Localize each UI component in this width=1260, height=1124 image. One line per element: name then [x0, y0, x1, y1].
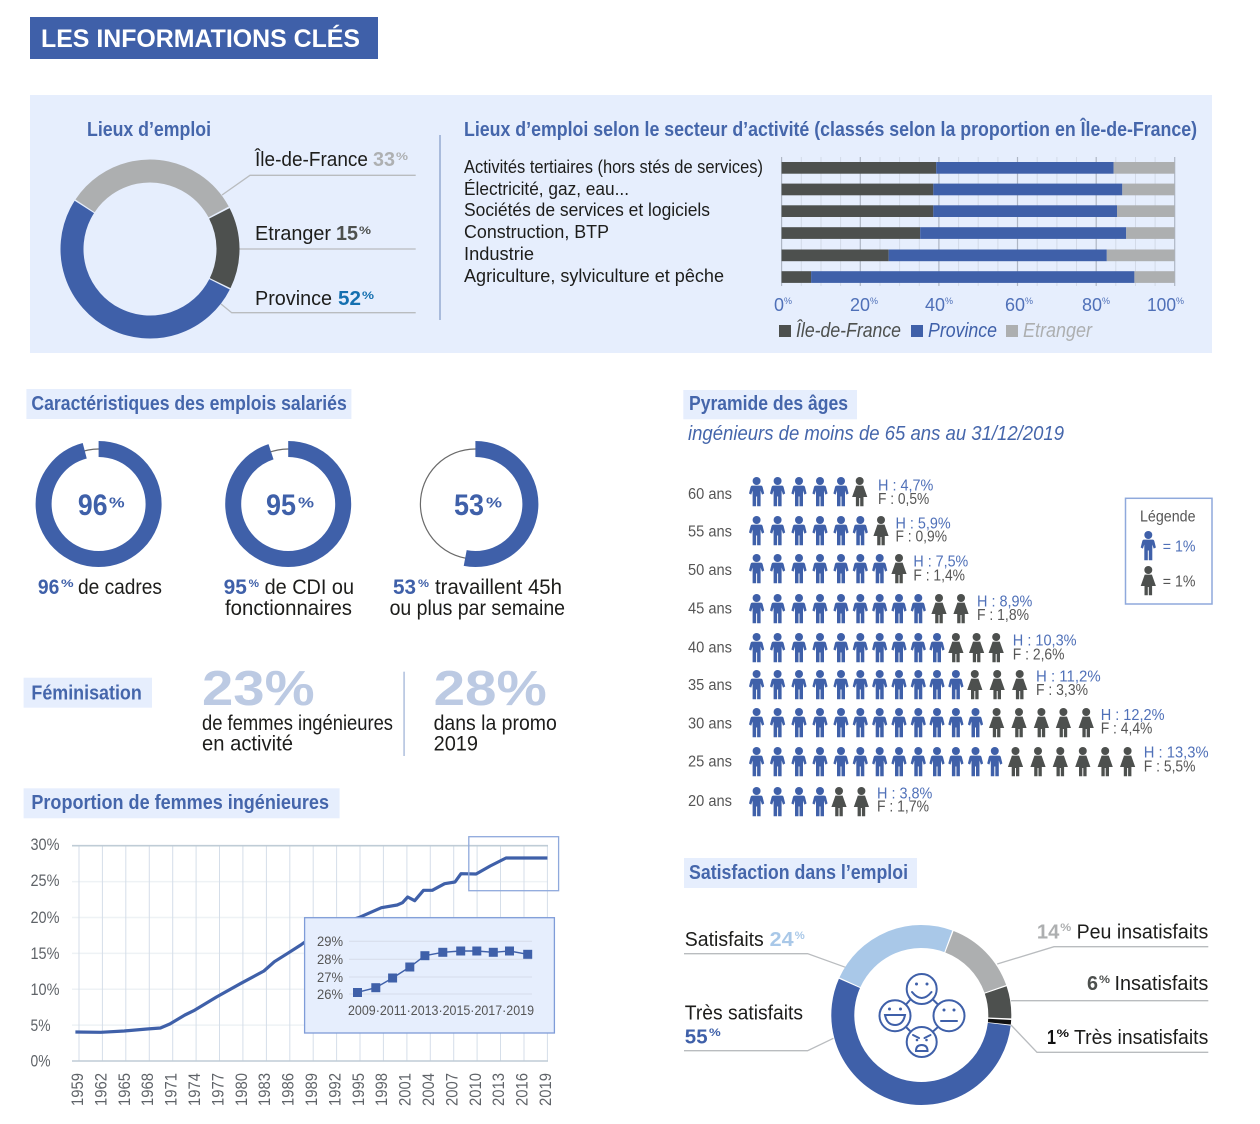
- x axis labels: 1965: [115, 1073, 134, 1106]
- section: proportion de femmes ingénieures: [24, 788, 340, 818]
- label: insatisfaits 6%: 6: [1087, 973, 1098, 995]
- pyramid row: 40 ans: F : 2,6%: [1013, 646, 1065, 663]
- pyramid row: 60 ans: H : 4,7%: [878, 478, 934, 495]
- y axis labels: 10%: [30, 980, 60, 999]
- pyramid row: 50 ans: H : 7,5%: [913, 554, 968, 571]
- x axis labels: 1989: [302, 1073, 321, 1106]
- pyramid row: 55 ans: F : 0,9%: [896, 529, 947, 546]
- section: pyramide des âges: Pyramide des âges: [689, 393, 848, 415]
- stat: 23% de femmes ingénieures: 23%: [202, 662, 315, 716]
- label: très insatisfaits 1%: 1: [1047, 1027, 1056, 1049]
- section: pyramide des âges: [683, 390, 857, 419]
- x axis labels: 1959: [68, 1073, 87, 1106]
- category labels: Construction, BTP: [464, 222, 609, 242]
- label: peu insatisfaits 14%: 14: [1037, 921, 1060, 943]
- bar chart axis labels: %: [945, 296, 953, 306]
- pyramid row: 35 ans: F : 3,3%: [1036, 682, 1088, 699]
- category labels: Agriculture, sylviculture et pêche: [464, 266, 724, 286]
- bar chart axis labels: %: [784, 296, 792, 306]
- section: satisfaction dans l'emploi: Satisfaction dans l’emploi: [689, 862, 908, 884]
- pyramid row: 50 ans: [688, 554, 968, 585]
- x axis labels: 2007: [442, 1073, 461, 1106]
- ring: 95% de CDI: fonctionnaires: [225, 597, 352, 620]
- ring: 53% travaillent 45h: %: [418, 578, 429, 590]
- label: insatisfaits 6%: %: [1099, 974, 1110, 986]
- donut chart: lieux d'emploi: 33: [373, 149, 395, 171]
- ring: 95% de CDI: %: [298, 495, 314, 512]
- y axis labels: 15%: [30, 944, 60, 963]
- inset chart: 2009-2019: 26%: [317, 986, 343, 1002]
- label: satisfaits 24%: [685, 929, 805, 951]
- label: satisfaits 24%: %: [795, 930, 805, 942]
- x axis labels: 2016: [513, 1073, 532, 1106]
- x axis labels: 1974: [185, 1073, 204, 1106]
- bar chart axis labels: 0: [774, 295, 784, 315]
- pyramid row: 35 ans: 35 ans: [688, 677, 732, 694]
- pyramid row: 20 ans: F : 1,7%: [877, 799, 929, 816]
- ring: 96% de cadres: 96: [38, 576, 59, 599]
- donut chart: lieux d'emploi: Île-de-France: [254, 148, 368, 171]
- stat: 28% dans la promo 2019: 2019: [434, 733, 478, 756]
- pyramid row: 20 ans: H : 3,8%: [877, 785, 933, 802]
- label: peu insatisfaits 14%: %: [1060, 922, 1072, 934]
- stat: 28% dans la promo 2019: [434, 662, 557, 756]
- bar chart axis labels: 100: [1147, 295, 1176, 315]
- ring: 53% travaillent 45h: [390, 449, 565, 620]
- ring: 53% travaillent 45h: %: [486, 495, 502, 512]
- y axis labels: 20%: [30, 908, 60, 927]
- stat: 23% de femmes ingénieures: de femmes ingénieures: [202, 712, 393, 735]
- bar chart axis labels: %: [1176, 296, 1184, 306]
- bar chart axis labels: %: [870, 296, 878, 306]
- y axis labels: 5%: [30, 1016, 50, 1035]
- y axis labels: 0%: [30, 1052, 50, 1071]
- label: satisfaits 24%: 24: [770, 929, 795, 951]
- label: insatisfaits 6%: Insatisfaits: [1114, 973, 1208, 995]
- pyramid row: 55 ans: 55 ans: [688, 524, 732, 541]
- bar chart axis labels: %: [1102, 296, 1110, 306]
- label: très satisfaits 55%: Très satisfaits: [685, 1002, 803, 1024]
- x axis labels: 1977: [208, 1073, 227, 1106]
- pyramid row: 20 ans: [688, 785, 933, 816]
- ring: 53% travaillent 45h: travaillent 45h: [435, 576, 562, 599]
- bar chart legend: Province: [928, 320, 997, 342]
- highlight box on 2009-2019: [469, 837, 559, 891]
- pyramid row: 60 ans: [688, 477, 934, 508]
- donut chart: lieux d'emploi: %: [396, 151, 408, 163]
- bar chart legend: [779, 319, 1093, 342]
- bar chart axis labels: [774, 295, 1184, 315]
- section: satisfaction dans l'emploi: [684, 858, 917, 888]
- legend: pyramide: = 1%: [1163, 574, 1196, 591]
- pyramid row: 30 ans: [688, 707, 1165, 737]
- category labels: Industrie: [464, 244, 534, 264]
- y axis labels: 25%: [30, 871, 60, 890]
- bar chart axis labels: 20: [850, 295, 870, 315]
- pyramid row: 55 ans: [688, 515, 951, 546]
- pyramid row: 35 ans: [688, 669, 1101, 699]
- label: satisfaits 24%: Satisfaits: [685, 929, 764, 951]
- y axis labels: [30, 835, 60, 1071]
- bar chart axis labels: 80: [1082, 295, 1102, 315]
- pyramid row: 50 ans: F : 1,4%: [913, 568, 965, 585]
- bar chart legend: Île-de-France: [796, 319, 901, 342]
- pyramid row: 30 ans: 30 ans: [688, 715, 732, 732]
- pyramid row: 20 ans: 20 ans: [688, 793, 732, 810]
- donut chart: lieux d'emploi: 15: [336, 223, 358, 245]
- heading: lieux d'emploi: Lieux d’emploi: [87, 119, 211, 141]
- title: LES INFORMATIONS CLÉS: [41, 24, 360, 53]
- x axis labels: 2001: [396, 1073, 415, 1106]
- ring: 95% de CDI: de CDI ou: [265, 576, 354, 599]
- pyramid row: 30 ans: H : 12,2%: [1101, 707, 1165, 724]
- x axis labels: [68, 1073, 555, 1106]
- x axis labels: 2019: [536, 1073, 555, 1106]
- inset chart: 2009-2019: [305, 918, 554, 1033]
- ring: 95% de CDI: 95: [266, 489, 296, 522]
- pyramid row: 40 ans: 40 ans: [688, 639, 732, 656]
- x axis labels: 1992: [325, 1073, 344, 1106]
- subtitle: ingénieurs de moins de 65 ans: ingénieurs de moins de 65 ans au 31/12/2019: [688, 423, 1064, 445]
- label: peu insatisfaits 14%: Peu insatisfaits: [1077, 921, 1208, 943]
- ring: 96% de cadres: 96: [78, 489, 108, 522]
- bar chart axis labels: %: [1025, 296, 1033, 306]
- ring: 95% de CDI: [224, 449, 354, 620]
- stat: 28% dans la promo 2019: 28%: [434, 662, 547, 716]
- label: très satisfaits 55%: 55: [685, 1026, 708, 1048]
- pyramid row: 35 ans: H : 11,2%: [1036, 669, 1101, 686]
- stacked bar chart: [782, 157, 1175, 286]
- stat: 23% de femmes ingénieures: [202, 662, 393, 756]
- category labels: Activités tertiaires (hors stés de services): [464, 157, 763, 177]
- pyramid row: 45 ans: F : 1,8%: [977, 607, 1029, 624]
- pyramid row: 60 ans: F : 0,5%: [878, 491, 929, 508]
- section: féminisation: Féminisation: [31, 682, 142, 704]
- donut chart: lieux d'emploi: [42, 141, 416, 357]
- inset chart: 2009-2019: 2009·2011·2013·2015·2017·2019: [348, 1002, 534, 1018]
- x axis labels: 1995: [349, 1073, 368, 1106]
- legend: pyramide: Légende: [1140, 509, 1196, 526]
- ring: 53% travaillent 45h: 53: [454, 489, 484, 522]
- panel: lieux d'emploi: [30, 95, 1212, 357]
- x axis labels: 2010: [466, 1073, 485, 1106]
- x axis labels: 1986: [279, 1073, 298, 1106]
- x axis labels: 1971: [162, 1073, 181, 1106]
- pyramid row: 25 ans: [688, 745, 1209, 776]
- label: très insatisfaits 1%: Très insatisfaits: [1074, 1027, 1208, 1049]
- bar chart axis labels: 40: [925, 295, 945, 315]
- legend: pyramide: = 1%: [1163, 539, 1196, 556]
- inset chart: 2009-2019: 27%: [317, 969, 343, 985]
- ring: 96% de cadres: de cadres: [78, 576, 162, 599]
- donut chart: lieux d'emploi: Province: [255, 288, 332, 310]
- category labels: [464, 157, 763, 286]
- x axis labels: 1980: [232, 1073, 251, 1106]
- ring: 96% de cadres: %: [109, 495, 125, 512]
- section: proportion de femmes ingénieures: Proportion de femmes ingénieures: [31, 792, 329, 814]
- x axis labels: 1983: [255, 1073, 274, 1106]
- icon: smileys: [880, 974, 964, 1057]
- pyramid row: 45 ans: 45 ans: [688, 600, 732, 617]
- category labels: Électricité, gaz, eau...: [464, 179, 629, 199]
- pyramid row: 55 ans: H : 5,9%: [896, 515, 951, 532]
- pyramid row: 45 ans: [688, 594, 1033, 624]
- pyramid row: 25 ans: F : 5,5%: [1144, 759, 1196, 776]
- donut chart: lieux d'emploi: %: [362, 290, 374, 302]
- category labels: Sociétés de services et logiciels: [464, 200, 710, 220]
- ring: 95% de CDI: %: [249, 578, 259, 590]
- pyramid row: 40 ans: [688, 633, 1077, 663]
- donut chart: satisfaction: [684, 911, 1208, 1119]
- section: caractéristiques des emplois salariés: Caractéristiques des emplois salariés: [31, 393, 347, 415]
- inset chart: 2009-2019: 29%: [317, 933, 343, 949]
- pyramid row: 50 ans: 50 ans: [688, 562, 732, 579]
- legend: pyramide: [1126, 498, 1212, 604]
- x axis labels: 1968: [138, 1073, 157, 1106]
- x axis labels: 1998: [372, 1073, 391, 1106]
- pyramid row: 40 ans: H : 10,3%: [1013, 633, 1077, 650]
- stat: 28% dans la promo 2019: dans la promo: [434, 712, 557, 735]
- y axis labels: 30%: [30, 835, 60, 854]
- line chart: proportion de femmes: [30, 835, 559, 1106]
- bar chart legend: Etranger: [1023, 320, 1093, 342]
- x axis labels: 2004: [419, 1073, 438, 1106]
- pyramid row: 30 ans: F : 4,4%: [1101, 720, 1153, 737]
- bar chart axis labels: 60: [1005, 295, 1025, 315]
- pyramid row: 25 ans: 25 ans: [688, 754, 732, 771]
- inset chart: 2009-2019: 28%: [317, 951, 343, 967]
- section: caractéristiques des emplois salariés: [26, 389, 351, 419]
- title: [30, 17, 378, 59]
- x axis labels: 2013: [489, 1073, 508, 1106]
- label: très satisfaits 55%: %: [709, 1027, 721, 1039]
- pyramid row: 25 ans: H : 13,3%: [1144, 745, 1209, 762]
- stat: 23% de femmes ingénieures: en activité: [202, 733, 293, 756]
- section: féminisation: [24, 678, 152, 708]
- ring: 96% de cadres: %: [61, 578, 74, 590]
- pyramid row: 45 ans: H : 8,9%: [977, 594, 1033, 611]
- donut chart: lieux d'emploi: 52: [338, 288, 361, 310]
- pyramid row: 60 ans: 60 ans: [688, 486, 732, 503]
- donut chart: lieux d'emploi: %: [359, 225, 371, 237]
- ring: 53% travaillent 45h: 53: [393, 576, 416, 599]
- label: très satisfaits 55%: [685, 1002, 803, 1048]
- label: très insatisfaits 1%: %: [1057, 1028, 1069, 1040]
- x axis labels: 1962: [91, 1073, 110, 1106]
- ring: 96% de cadres: [38, 449, 162, 599]
- ring: 53% travaillent 45h: ou plus par semaine: [390, 597, 565, 620]
- donut chart: lieux d'emploi: Etranger: [255, 223, 331, 245]
- ring: 95% de CDI: 95: [224, 576, 247, 599]
